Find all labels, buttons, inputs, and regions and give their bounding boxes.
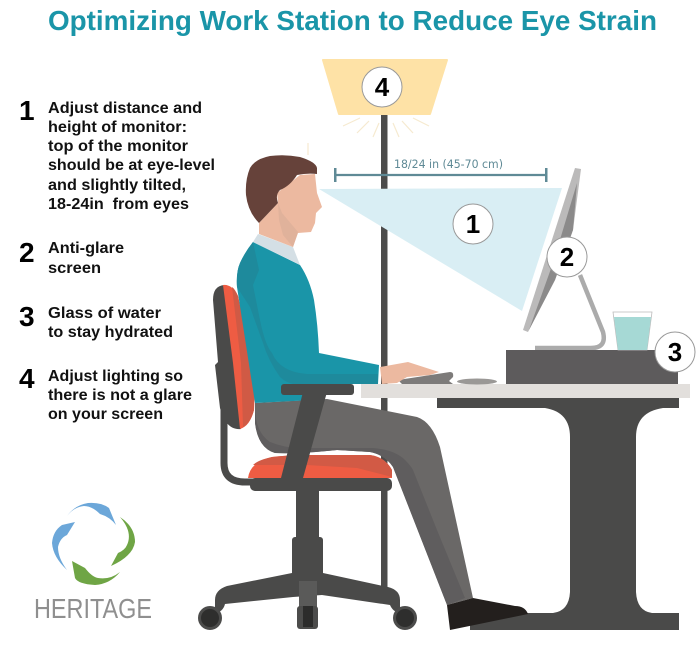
neck and face [259, 174, 322, 247]
list item 1: should be at eye-level [48, 157, 215, 174]
lamp shade [323, 60, 447, 114]
list item 2: Anti-glare [48, 240, 124, 257]
sweater [237, 242, 379, 403]
list item 4: Adjust lighting so [48, 368, 183, 385]
list item 3: to stay hydrated [48, 324, 173, 341]
list item 1: and slightly tilted, [48, 177, 186, 194]
chair frame [224, 360, 255, 482]
person [237, 155, 528, 630]
chair wheels [200, 608, 416, 628]
callout 3 [655, 332, 695, 372]
seat plate [250, 478, 392, 491]
callout 1: 1 [466, 209, 480, 239]
logo: Heritage: HERITAGE [34, 593, 152, 624]
trousers [255, 399, 473, 605]
hand [380, 362, 439, 384]
distance measure: 18/24 in (45-70 cm) [394, 157, 503, 171]
armrest [281, 384, 354, 395]
list item 2: 2 [19, 237, 35, 268]
list item 2 [19, 237, 124, 277]
callout 2: 2 [560, 242, 574, 272]
list item 4: 4 [19, 363, 35, 394]
list item 2: screen [48, 260, 101, 277]
callout 2 [547, 237, 587, 277]
callout 4 [362, 67, 402, 107]
shoe [447, 598, 528, 630]
list item 1: height of monitor: [48, 119, 187, 136]
monitor [523, 168, 604, 348]
list item 4: on your screen [48, 406, 163, 423]
chair seat and arm [248, 384, 392, 491]
chair base [215, 488, 400, 613]
lamp light rays [308, 118, 429, 155]
list item 3: 3 [19, 301, 35, 332]
list item 4 [19, 363, 192, 423]
list item 1: 1 [19, 95, 35, 126]
list item 3 [19, 301, 173, 341]
list item 4: there is not a glare [48, 387, 192, 404]
list item 1 [19, 95, 215, 213]
collar [253, 234, 300, 265]
callout 1 [453, 204, 493, 244]
lamp pole [381, 115, 388, 587]
callout 4: 4 [375, 72, 390, 102]
viewing cone [319, 188, 562, 311]
armrest post [281, 392, 327, 478]
glass of water [613, 312, 652, 350]
desk [361, 384, 690, 630]
logo: Heritage [34, 503, 152, 624]
title: Optimizing Work Station to Reduce Eye Strain [48, 5, 657, 36]
keyboard and mouse [398, 372, 497, 384]
panel: numbered list [19, 95, 215, 423]
hair [246, 155, 317, 223]
list item 3: Glass of water [48, 305, 161, 322]
chair front leg [297, 581, 318, 629]
list item 1: Adjust distance and [48, 100, 202, 117]
list item 1: 18-24in from eyes [48, 196, 189, 213]
list item 1: top of the monitor [48, 138, 188, 155]
computer box [506, 350, 678, 384]
chair back pad [213, 285, 255, 429]
chair [200, 285, 416, 629]
callout 3: 3 [668, 337, 682, 367]
seat cushion [248, 455, 392, 478]
